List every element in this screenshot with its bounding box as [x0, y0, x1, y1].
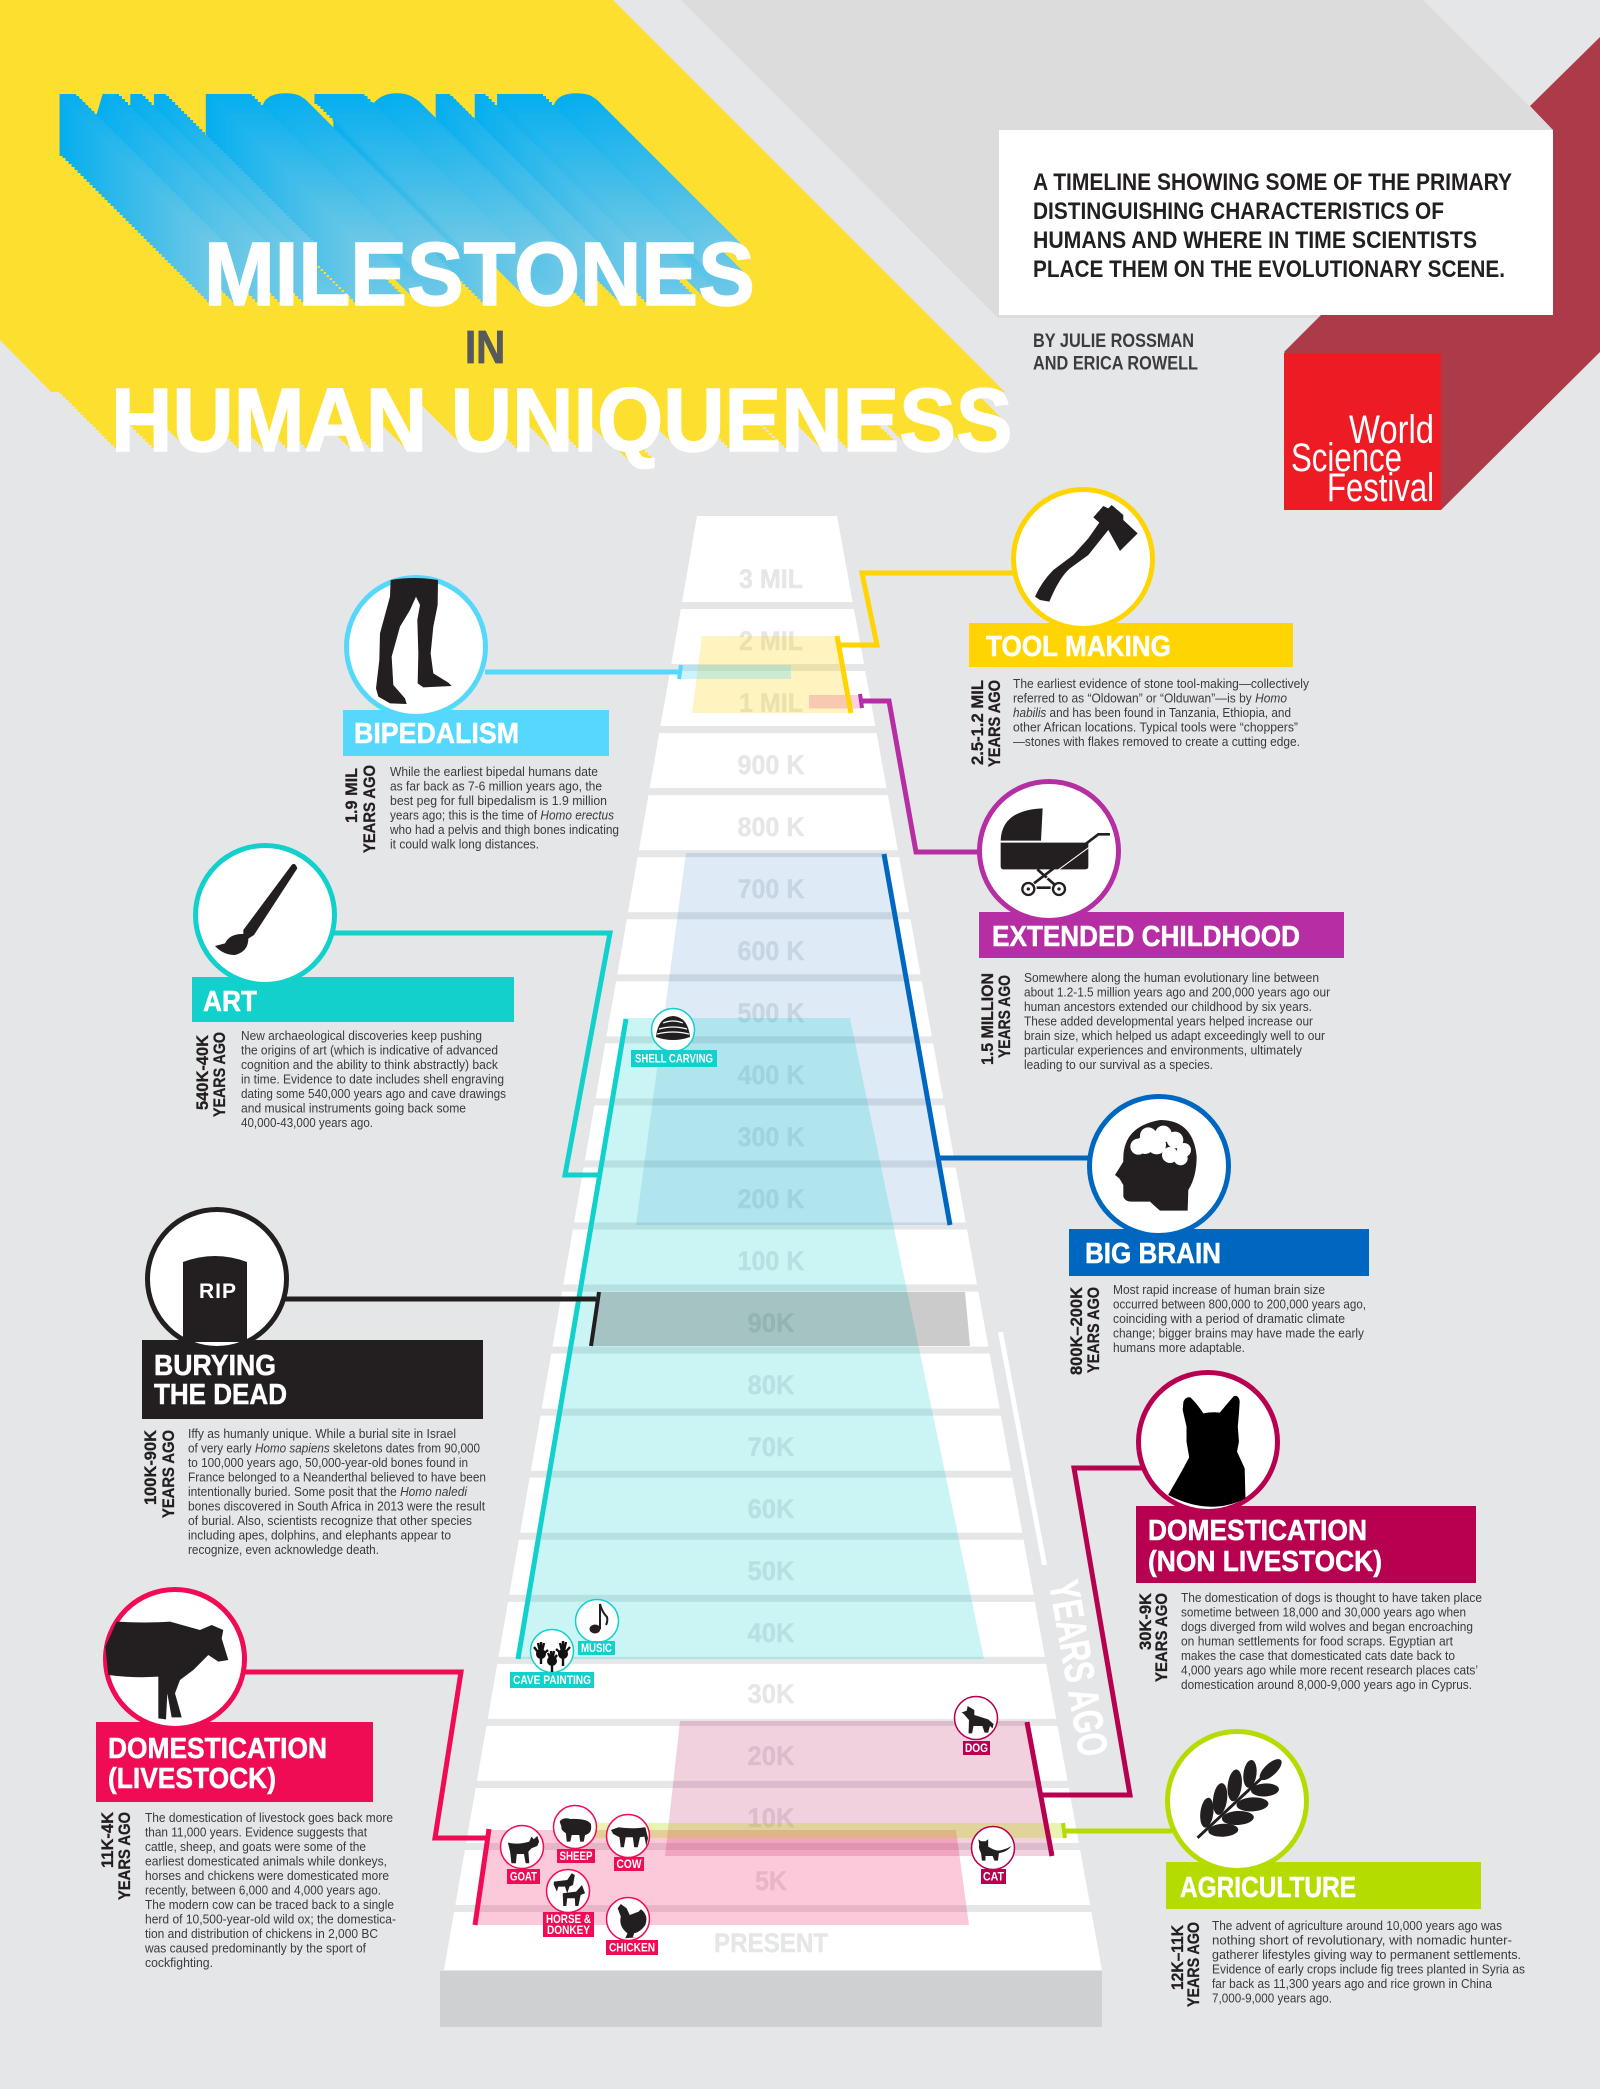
icon: chicken: CHICKEN	[609, 1942, 655, 1954]
icon: wheat	[1168, 1732, 1306, 1870]
logo: World Science Festival: World	[1349, 408, 1434, 452]
icon: tombstone: RIP	[199, 1280, 236, 1303]
text block: 7,000-9,000 years ago.	[1212, 1992, 1332, 2006]
connector	[332, 933, 610, 1175]
timeline ladder: 900 K	[738, 750, 805, 780]
heading	[1166, 1862, 1481, 1909]
icon: horse and donkey: HORSE &	[546, 1914, 591, 1926]
text block: earliest domesticated animals while donkeys,	[145, 1854, 387, 1868]
timeline ladder: 5K	[755, 1866, 787, 1896]
text block: change; bigger brains may have made the early	[1113, 1326, 1365, 1340]
text block: domestication around 8,000-9,000 years ago in Cyprus.	[1181, 1678, 1472, 1692]
text block: other African locations. Typical tools were “choppers”	[1013, 720, 1298, 734]
date: YEARS AGO	[210, 1032, 229, 1117]
date: YEARS AGO	[115, 1812, 134, 1900]
icon: shell carving	[631, 1008, 717, 1067]
timeline ladder: 50K	[748, 1556, 795, 1586]
heading: ART	[203, 986, 257, 1018]
text block: years ago; this is the time of Homo erectus	[390, 808, 614, 822]
icon: cow	[105, 1590, 244, 1728]
icon: dog	[954, 1696, 998, 1755]
icon: axe	[1014, 490, 1152, 628]
text block: cognition and the ability to think abstractly) back	[241, 1058, 499, 1072]
connector	[485, 670, 680, 674]
text block	[1113, 1283, 1366, 1355]
date	[1136, 1592, 1171, 1682]
icon: cave painting	[510, 1630, 594, 1688]
timeline ladder: 1 MIL	[739, 688, 803, 718]
range marker	[518, 1019, 626, 1659]
text block: The domestication of livestock goes back more	[145, 1811, 393, 1825]
text block: as far back as 7-6 million years ago, the	[390, 780, 602, 794]
range marker	[679, 665, 681, 679]
text block: brain size, which helped us adapt exceedingly well to our	[1024, 1029, 1325, 1043]
range marker	[591, 1292, 599, 1346]
panel: agriculture	[1063, 1732, 1525, 2007]
byline	[1033, 331, 1198, 374]
timeline ladder: 200 K	[738, 1184, 805, 1214]
intro box: HUMANS AND WHERE IN TIME SCIENTISTS	[1033, 227, 1477, 254]
text block: dating some 540,000 years ago and cave drawings	[241, 1087, 506, 1101]
text block: and musical instruments going back some	[241, 1102, 466, 1116]
text block: humans more adaptable.	[1113, 1341, 1245, 1355]
band: tool making	[692, 636, 851, 713]
heading	[969, 623, 1293, 667]
date: 2.5-1.2 MIL	[968, 680, 987, 765]
range marker	[475, 1829, 489, 1925]
text block: on human settlements for food scraps. Egyptian art	[1181, 1634, 1453, 1648]
text block	[241, 1029, 506, 1130]
date: YEARS AGO	[1184, 1922, 1203, 2007]
date: YEARS AGO	[985, 680, 1004, 767]
icon: head with brain	[1090, 1096, 1228, 1236]
icon: horse and donkey	[543, 1870, 594, 1937]
timeline ladder: 20K	[748, 1741, 795, 1771]
text block: —stones with flakes removed to create a cutting edge.	[1013, 735, 1300, 749]
intro box: PLACE THEM ON THE EVOLUTIONARY SCENE.	[1033, 256, 1505, 283]
date	[342, 765, 379, 853]
title line: human uniqueness with yellow long shadow: HUMAN UNIQUENESS	[111, 371, 1013, 471]
connector	[285, 1296, 596, 1302]
date: 1.5 MILLION	[978, 973, 997, 1065]
text block: the origins of art (which is indicative of advanced	[241, 1044, 498, 1058]
date: 30K-9K	[1136, 1592, 1155, 1650]
heading	[1069, 1229, 1369, 1276]
heading: THE DEAD	[154, 1379, 287, 1411]
text block: 40,000-43,000 years ago.	[241, 1116, 373, 1130]
timeline ladder: 400 K	[738, 1060, 805, 1090]
years ago axis label: YEARS AGO	[1040, 1576, 1117, 1760]
text block: cockfighting.	[145, 1956, 213, 1970]
timeline ladder: 100 K	[738, 1246, 805, 1276]
text block: who had a pelvis and thigh bones indicating	[389, 823, 619, 837]
icon: cow small: COW	[616, 1859, 642, 1871]
byline: BY JULIE ROSSMAN	[1033, 331, 1194, 352]
text block: than 11,000 years. Evidence suggests that	[145, 1826, 367, 1840]
text block: The modern cow can be traced back to a single	[145, 1898, 394, 1912]
text block: of burial. Also, scientists recognize that other species	[188, 1514, 472, 1528]
date: YEARS AGO	[1084, 1287, 1103, 1373]
connector	[938, 1156, 1092, 1160]
icon: paintbrush	[196, 846, 334, 984]
text block: it could walk long distances.	[390, 838, 539, 852]
timeline ladder: 3 MIL	[739, 564, 803, 594]
heading: (NON LIVESTOCK)	[1148, 1546, 1382, 1578]
text block: makes the case that domesticated cats date back to	[1181, 1649, 1455, 1663]
timeline ladder: 300 K	[738, 1122, 805, 1152]
intro box	[999, 130, 1553, 315]
text block: including apes, dolphins, and elephants appear to	[188, 1528, 451, 1542]
date: YEARS AGO	[159, 1430, 178, 1518]
panel: extended childhood	[860, 694, 1344, 1072]
text block: dogs diverged from wild wolves and began encroaching	[1181, 1620, 1473, 1634]
text block: sometime between 18,000 and 30,000 years ago when	[1181, 1606, 1466, 1620]
date	[1067, 1286, 1103, 1375]
range marker	[1027, 1722, 1052, 1856]
text block: about 1.2-1.5 million years ago and 200,000 years ago our	[1024, 986, 1330, 1000]
date	[141, 1429, 178, 1518]
title line: milestones with blue long shadow: MILESTONES	[204, 225, 755, 325]
timeline ladder: 600 K	[738, 936, 805, 966]
text block: herd of 10,500-year-old wild ox; the domestica-	[145, 1912, 396, 1926]
heading: (LIVESTOCK)	[108, 1763, 276, 1795]
band: agriculture	[592, 1823, 1064, 1838]
heading: BIPEDALISM	[354, 718, 519, 750]
text block: leading to our survival as a species.	[1024, 1058, 1213, 1072]
icon: chicken	[606, 1898, 658, 1955]
intro box: DISTINGUISHING CHARACTERISTICS OF	[1033, 198, 1444, 225]
text block: France belonged to a Neanderthal believed to have been	[188, 1470, 486, 1484]
text block: bones discovered in South Africa in 2013 were the result	[188, 1500, 485, 1514]
text block: in time. Evidence to date includes shell engraving	[241, 1072, 504, 1086]
icon: tombstone	[148, 1210, 286, 1348]
title line: in: IN	[465, 321, 505, 373]
text block: habilis and has been found in Tanzania, Ethiopia, and	[1013, 706, 1291, 720]
years ago rail line	[998, 1332, 1047, 1565]
logo: World Science Festival: Festival	[1327, 466, 1434, 510]
text block: The earliest evidence of stone tool-making—collectively	[1013, 677, 1310, 691]
text block: Iffy as humanly unique. While a burial site in Israel	[188, 1427, 456, 1441]
text block: coinciding with a period of dramatic climate	[1113, 1312, 1345, 1326]
date: 800K–200K	[1067, 1286, 1086, 1375]
text block: to 100,000 years ago, 50,000-year-old bones found in	[188, 1456, 468, 1470]
date: 1.9 MIL	[342, 768, 361, 823]
text block	[1013, 677, 1310, 749]
band: domestication livestock	[475, 1830, 969, 1925]
panel: domestication livestock	[96, 1590, 489, 1970]
icon: cow small	[606, 1814, 650, 1871]
icon: cat	[1138, 1372, 1278, 1512]
text block: Most rapid increase of human brain size	[1113, 1283, 1325, 1297]
text block: particular experiences and environments, ultimately	[1024, 1044, 1303, 1058]
text block: gatherer lifestyles giving way to permanent settlements.	[1212, 1948, 1521, 1962]
text block	[389, 765, 619, 852]
text block	[144, 1811, 396, 1970]
connector	[838, 573, 1015, 645]
panel: bipedalism	[342, 578, 681, 853]
connector	[1040, 1468, 1142, 1795]
date: 11K-4K	[98, 1811, 117, 1868]
date: 12K–11K	[1168, 1924, 1187, 1990]
text block	[1024, 971, 1330, 1072]
text block: horses and chickens were domesticated more	[145, 1869, 389, 1883]
text block: New archaeological discoveries keep pushing	[241, 1029, 482, 1043]
icon: music	[576, 1600, 618, 1655]
band: domestication non livestock	[665, 1721, 1052, 1856]
text block: cattle, sheep, and goats were some of the	[145, 1840, 366, 1854]
band: burying the dead	[592, 1292, 970, 1346]
logo: World Science Festival: Science	[1291, 436, 1402, 480]
range marker	[837, 636, 851, 713]
icon: pram	[980, 782, 1118, 920]
icon: cat small	[972, 1826, 1014, 1884]
timeline ladder	[400, 516, 1150, 1970]
text block: of very early Homo sapiens skeletons dates from 90,000	[188, 1442, 480, 1456]
date: 100K-90K	[141, 1429, 160, 1505]
text block	[1181, 1591, 1482, 1692]
band: bipedalism	[681, 665, 791, 679]
timeline ladder: 800 K	[738, 812, 805, 842]
date	[978, 973, 1014, 1065]
panel: art	[192, 846, 626, 1659]
byline: AND ERICA ROWELL	[1033, 354, 1198, 374]
range marker	[860, 694, 862, 708]
title	[60, 93, 1013, 471]
heading	[142, 1340, 483, 1419]
icon: dog: DOG	[965, 1743, 988, 1755]
date	[968, 680, 1004, 767]
text block: While the earliest bipedal humans date	[390, 765, 598, 779]
text block	[188, 1427, 486, 1557]
timeline ladder: 40K	[748, 1618, 795, 1648]
text block: The advent of agriculture around 10,000 years ago was	[1212, 1919, 1502, 1933]
icon: shell carving: SHELL CARVING	[635, 1054, 713, 1066]
text block: These added developmental years helped increase our	[1024, 1014, 1313, 1028]
panel: burying the dead	[141, 1210, 599, 1557]
panel: big brain	[884, 854, 1369, 1375]
heading: DOMESTICATION	[1148, 1515, 1367, 1547]
timeline ladder: 10K	[748, 1803, 795, 1833]
timeline ladder: 700 K	[738, 874, 805, 904]
icon: goat	[500, 1826, 544, 1884]
timeline ladder: PRESENT	[714, 1928, 828, 1958]
text block: best peg for full bipedalism is 1.9 million	[390, 794, 607, 808]
timeline ladder: 500 K	[738, 998, 805, 1028]
date: YEARS AGO	[995, 975, 1014, 1058]
text block	[1212, 1919, 1525, 2006]
heading: TOOL MAKING	[986, 631, 1171, 663]
heading: BIG BRAIN	[1085, 1238, 1221, 1270]
range marker	[1063, 1823, 1065, 1838]
heading: EXTENDED CHILDHOOD	[992, 921, 1300, 953]
icon: music: MUSIC	[581, 1643, 612, 1655]
timeline ladder: 70K	[748, 1432, 795, 1462]
date: 540K-40K	[193, 1034, 212, 1110]
heading: DOMESTICATION	[108, 1733, 327, 1765]
text block: referred to as “Oldowan” or “Olduwan”—is by Homo	[1013, 692, 1287, 706]
connector	[1066, 1828, 1172, 1834]
text block: Evidence of early crops include fig trees planted in Syria as	[1212, 1962, 1525, 1976]
text block: occurred between 800,000 to 200,000 years ago,	[1113, 1298, 1366, 1312]
heading	[979, 912, 1344, 958]
text block: The domestication of dogs is thought to have taken place	[1181, 1591, 1482, 1605]
text block: was caused predominantly by the sport of	[144, 1942, 367, 1956]
text block: human ancestors extended our childhood by six years.	[1024, 1000, 1312, 1014]
text block: 4,000 years ago while more recent research places cats’	[1181, 1664, 1478, 1678]
connector	[862, 701, 982, 852]
heading	[96, 1722, 373, 1802]
icon: cave painting: CAVE PAINTING	[513, 1675, 591, 1687]
date: YEARS AGO	[1152, 1593, 1171, 1682]
timeline ladder: 60K	[748, 1494, 795, 1524]
text block: tion and distribution of chickens in 2,000 BC	[145, 1927, 378, 1941]
panel: tool making	[837, 490, 1310, 767]
logo: World Science Festival	[1284, 353, 1441, 510]
timeline base block	[440, 1971, 1102, 2027]
timeline ladder: 80K	[748, 1370, 795, 1400]
band: art	[518, 1018, 984, 1659]
text block: Somewhere along the human evolutionary line between	[1024, 971, 1319, 985]
panel: domestication non livestock	[1027, 1372, 1482, 1856]
band: big brain	[636, 853, 950, 1225]
date	[1168, 1922, 1203, 2007]
connector	[240, 1672, 486, 1838]
icon: legs	[346, 578, 486, 716]
heading: BURYING	[154, 1350, 276, 1382]
heading	[343, 710, 609, 756]
range marker	[884, 854, 950, 1225]
icon: horse and donkey: DONKEY	[547, 1925, 590, 1937]
timeline ladder: 2 MIL	[739, 626, 803, 656]
date	[98, 1811, 134, 1900]
text block: intentionally buried. Some posit that the Homo naledi	[188, 1485, 468, 1499]
intro box: A TIMELINE SHOWING SOME OF THE PRIMARY	[1033, 169, 1512, 196]
text block: recognize, even acknowledge death.	[188, 1543, 379, 1557]
heading: AGRICULTURE	[1180, 1872, 1356, 1904]
icon: goat: GOAT	[510, 1872, 537, 1884]
text block: recently, between 6,000 and 4,000 years ago.	[145, 1884, 381, 1898]
date	[193, 1032, 229, 1117]
heading	[192, 977, 514, 1022]
heading	[1136, 1506, 1476, 1583]
text block: far back as 11,300 years ago and rice grown in China	[1212, 1977, 1492, 1991]
band: extended childhood	[809, 695, 862, 708]
icon: sheep	[554, 1806, 596, 1863]
text block: nothing short of revolutionary, with nomadic hunter-	[1212, 1934, 1512, 1948]
timeline ladder: 90K	[748, 1308, 795, 1338]
icon: sheep: SHEEP	[560, 1851, 593, 1863]
timeline ladder: 30K	[748, 1679, 795, 1709]
icon: cat small: CAT	[983, 1872, 1004, 1884]
date: YEARS AGO	[360, 765, 379, 853]
